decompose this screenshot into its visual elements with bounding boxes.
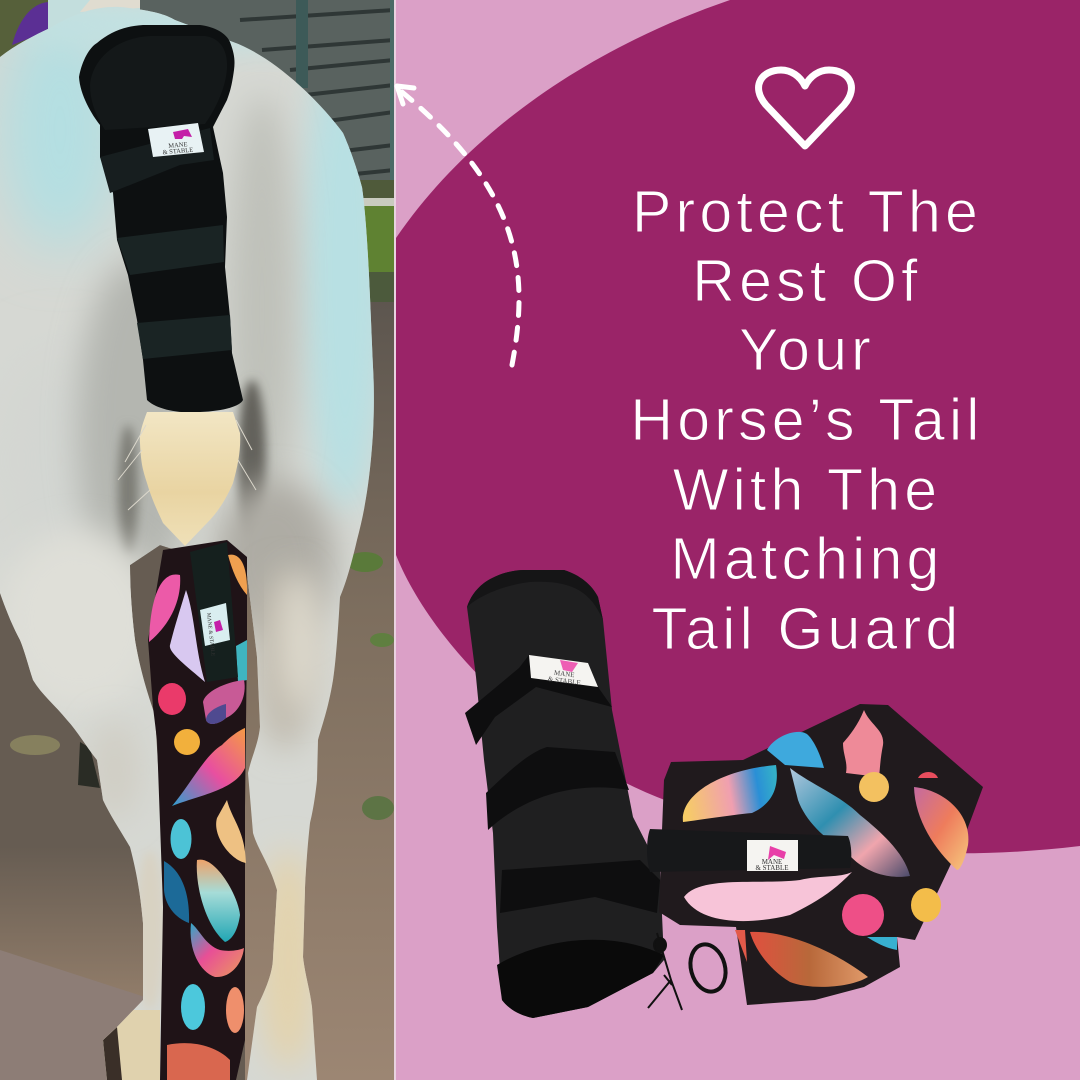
wrap label: & STABLE: [162, 147, 194, 156]
wrap label: MANE: [168, 141, 188, 150]
patterned tail bag: [148, 540, 247, 1080]
bag label: MANE & STABLE: [205, 613, 216, 657]
guard feathers and baubles: [683, 710, 968, 987]
heading: With The: [673, 457, 941, 523]
plum background shape: [396, 0, 1080, 853]
guard label: MANE: [762, 858, 782, 866]
icon: heart: [759, 70, 851, 146]
shed: [140, 0, 394, 180]
divider: [394, 0, 396, 1080]
heading: Horse’s Tail: [630, 387, 984, 453]
wrap label: [529, 655, 598, 687]
bag label: [200, 603, 230, 657]
heading: Rest Of: [692, 248, 922, 314]
hair tie: [685, 940, 731, 996]
product: feather tail guard: [647, 704, 983, 1005]
wrap label: & STABLE: [547, 675, 581, 687]
wrap label: [148, 123, 204, 157]
ground: [0, 302, 394, 1080]
guard label: & STABLE: [755, 864, 789, 872]
heading: Protect The: [632, 179, 982, 245]
drawcord with toggle: [648, 933, 682, 1010]
heading: Matching: [670, 526, 944, 592]
guard label: [747, 840, 798, 872]
panel: horse photo: [0, 0, 394, 1080]
heading: Your: [739, 317, 875, 383]
product: black fleece tail wrap: [465, 570, 682, 1018]
arrow: dashed curve pointing to tail wrap: [397, 86, 519, 365]
horse body: [0, 0, 394, 1080]
wrap label: MANE: [554, 669, 575, 679]
heading: Tail Guard: [652, 596, 962, 662]
boot in background: [78, 742, 100, 788]
background greenery and fence: [0, 0, 394, 302]
wrap straps: [465, 655, 660, 913]
black tail wrap: [79, 25, 243, 412]
elastic strap: [647, 829, 851, 872]
heading: [630, 179, 984, 662]
bag feathers and baubles: [149, 555, 247, 1080]
tail hair: [118, 412, 256, 546]
